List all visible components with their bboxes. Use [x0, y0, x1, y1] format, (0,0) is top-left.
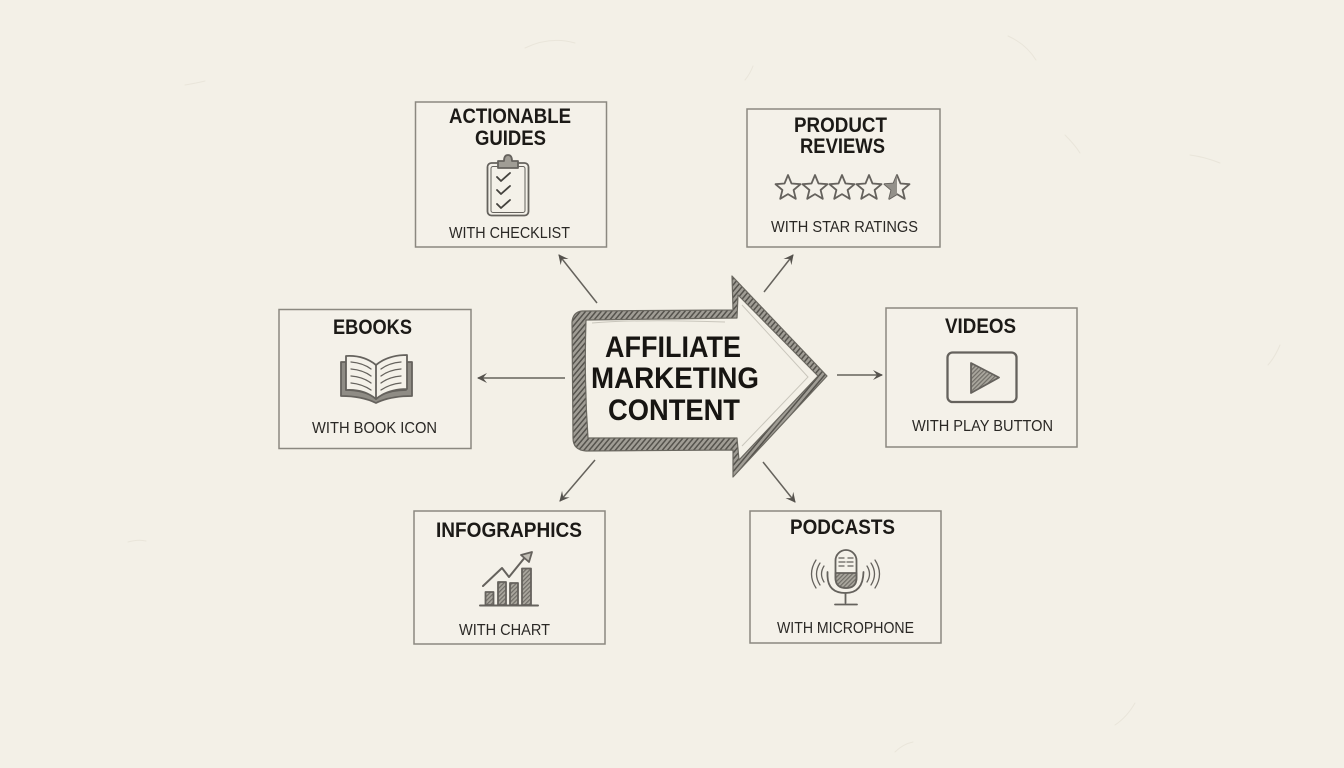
heading: PRODUCT — [794, 114, 887, 137]
icon: play button — [948, 352, 1016, 402]
arrow: down-left to infographics — [560, 460, 595, 501]
heading: ACTIONABLE — [449, 105, 571, 128]
caption: WITH PLAY BUTTON — [912, 418, 1053, 435]
icon: five star rating — [776, 175, 910, 199]
arrow title: CONTENT — [608, 394, 740, 427]
heading: EBOOKS — [333, 316, 412, 339]
arrow title: AFFILIATE — [605, 331, 741, 364]
heading: REVIEWS — [800, 135, 885, 158]
caption: WITH MICROPHONE — [777, 620, 914, 637]
icon: clipboard checklist — [488, 155, 528, 216]
central arrow: affiliate marketing content — [572, 276, 827, 477]
arrow title — [591, 331, 759, 427]
panel: podcasts — [750, 511, 941, 643]
panel: videos — [886, 308, 1077, 447]
caption: WITH BOOK ICON — [312, 420, 437, 437]
caption: WITH CHART — [459, 622, 550, 639]
panel: product reviews — [747, 109, 940, 247]
heading — [449, 105, 571, 150]
icon: microphone — [812, 550, 880, 604]
arrow: up-right to product reviews — [764, 255, 793, 292]
caption: WITH CHECKLIST — [449, 225, 570, 242]
heading: INFOGRAPHICS — [436, 519, 582, 542]
arrow: down-right to podcasts — [763, 462, 795, 502]
icon: rising bar chart — [480, 552, 538, 606]
panel: actionable guides — [416, 102, 606, 247]
arrow: right to videos — [837, 374, 882, 376]
panel: ebooks — [279, 310, 471, 448]
heading: GUIDES — [475, 127, 546, 150]
heading: PODCASTS — [790, 516, 895, 539]
arrow title: MARKETING — [591, 362, 759, 395]
arrow body with hatched outline — [572, 276, 827, 477]
arrow: left to ebooks — [478, 377, 565, 379]
icon: open book — [341, 355, 412, 403]
caption: WITH STAR RATINGS — [771, 219, 918, 236]
heading: VIDEOS — [945, 315, 1016, 338]
arrow inner highlight lines — [592, 305, 808, 446]
arrow: up-left to actionable guides — [559, 255, 597, 303]
heading — [794, 114, 887, 158]
panel: infographics — [414, 511, 605, 644]
